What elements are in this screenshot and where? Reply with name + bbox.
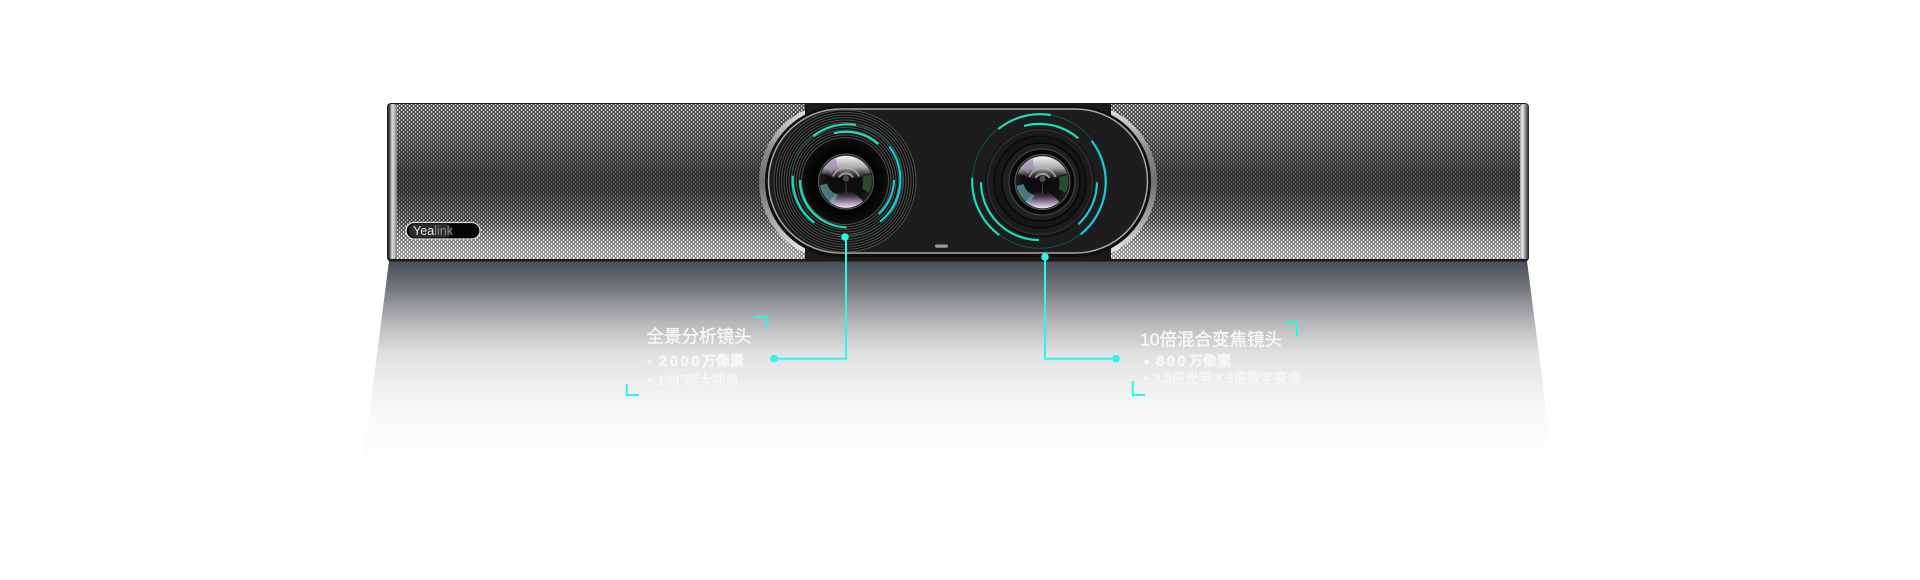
- reflection backdrop: [363, 261, 1553, 463]
- spec: resolution: 2000: [659, 353, 702, 370]
- central dark strip: [805, 103, 1111, 261]
- panoramic lens arcs: [792, 124, 902, 236]
- zoom lens: [985, 128, 1095, 238]
- spec: zoom range: 3.5倍光学: [1153, 371, 1212, 386]
- end cap: left: [388, 104, 397, 259]
- spec: field of view: 133°超大视角: [657, 373, 739, 388]
- speaker mesh: left: [396, 104, 806, 259]
- spec: zoom range: •: [1144, 371, 1149, 386]
- bar body: [387, 103, 1529, 262]
- callout heading: 10倍混合变焦镜头: [1140, 330, 1282, 350]
- spec: resolution: •: [647, 353, 652, 369]
- logo badge: Yealink: [413, 224, 454, 238]
- indicator light: [935, 244, 948, 248]
- callout: zoom lens: [1133, 323, 1301, 395]
- callout: panoramic lens: [627, 317, 766, 395]
- panoramic lens: [774, 110, 916, 252]
- chrome collar: [759, 103, 1157, 260]
- spec: resolution: 800: [1156, 353, 1188, 370]
- logo badge: [406, 222, 480, 239]
- plate outline: [768, 109, 1148, 253]
- connector: zoom lens: [1041, 253, 1120, 363]
- front plate: [765, 106, 1151, 257]
- spec: zoom range: ×3倍数字变焦: [1212, 367, 1301, 387]
- spec: field of view: •: [647, 373, 652, 388]
- spec: resolution: 万像素: [702, 353, 744, 369]
- connector: panoramic lens: [770, 233, 849, 363]
- callout frame corners: [1133, 323, 1297, 395]
- end cap: right: [1520, 104, 1529, 259]
- spec: resolution: 万像素: [1189, 353, 1231, 369]
- device: soundbar camera: [387, 103, 1529, 262]
- callout heading: 全景分析镜头: [646, 326, 752, 346]
- spec: resolution: •: [1144, 353, 1149, 369]
- speaker mesh: right: [1110, 104, 1521, 259]
- callout frame corners: [627, 317, 766, 395]
- zoom lens arcs: [972, 114, 1106, 248]
